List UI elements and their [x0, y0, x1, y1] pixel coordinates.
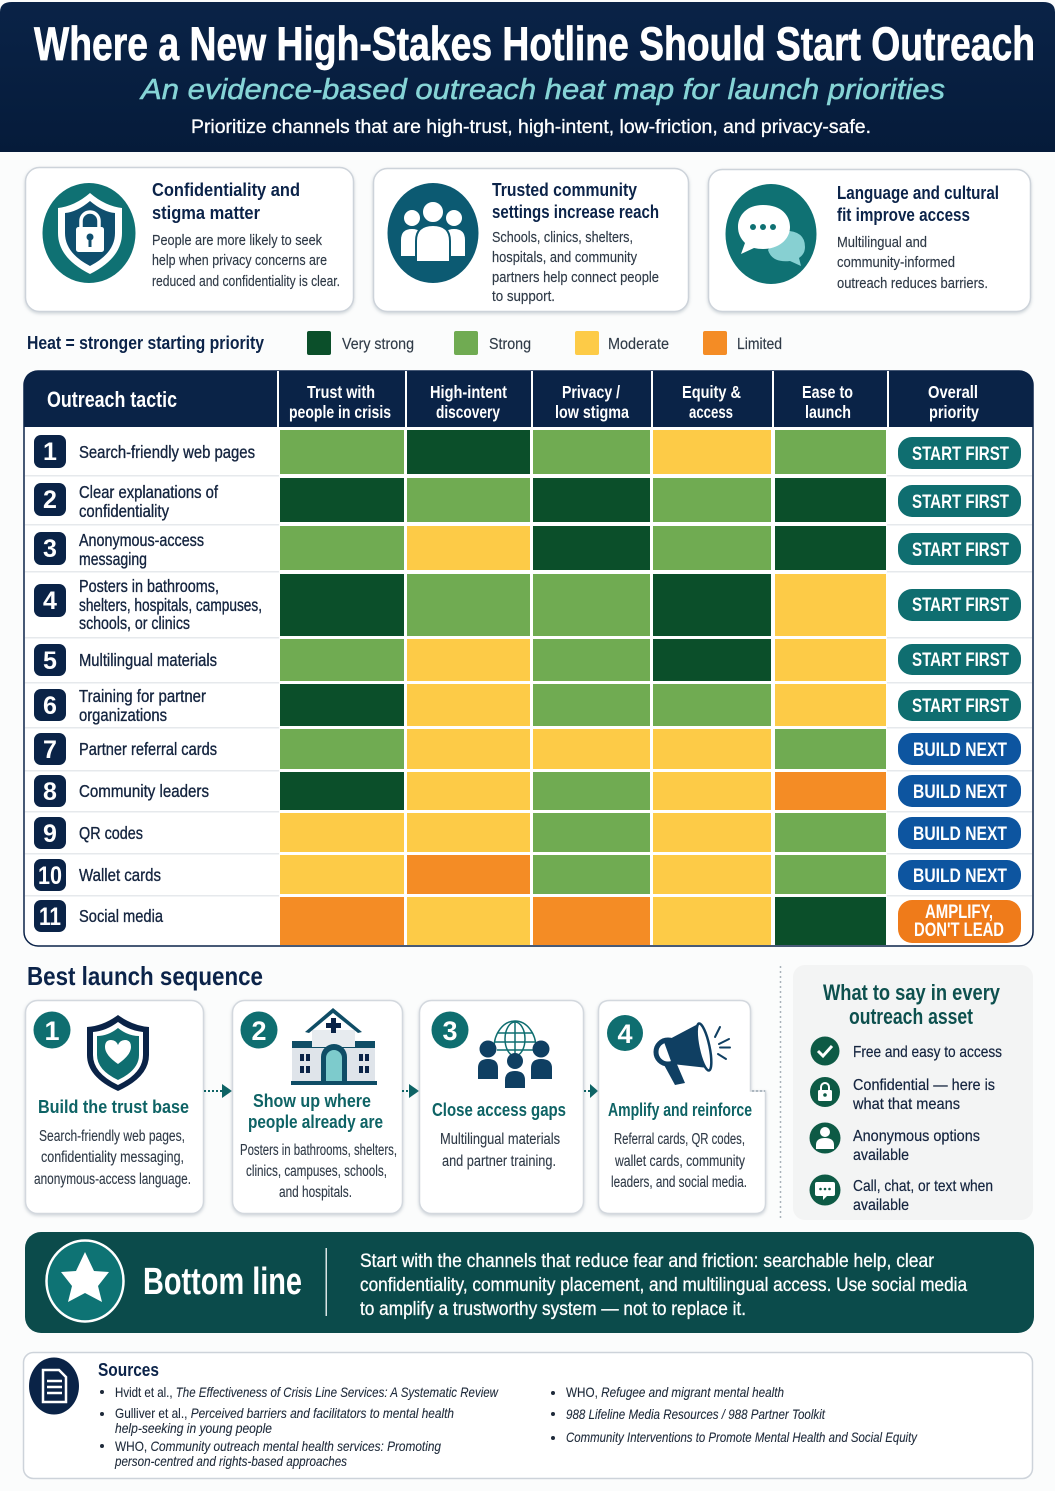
body text: reduced and confidentiality is clear. [152, 273, 340, 290]
row 6: training for partner organizations: 6 [43, 692, 57, 720]
item: free and easy [810, 1036, 1002, 1066]
subtitle: An evidence-based outreach heat map for launch priorities [139, 74, 945, 106]
item: confidential [810, 1077, 995, 1113]
table header: Ease to [802, 382, 853, 402]
step description: and hospitals. [279, 1184, 352, 1201]
item: call chat text [810, 1174, 993, 1214]
step description [34, 1128, 191, 1188]
row 3: anonymous-access messaging: 3 [43, 535, 57, 563]
panel: trusted community settings [374, 168, 688, 312]
panel: confidentiality and stigma [26, 168, 354, 312]
step 4: amplify and reinforce [598, 1000, 766, 1214]
table header: discovery [436, 402, 500, 422]
step description: clinics, campuses, schools, [246, 1163, 387, 1180]
table header: Privacy / [562, 382, 620, 402]
step description [611, 1131, 747, 1191]
row 11: social media [34, 897, 1021, 945]
step heading: Close access gaps [432, 1099, 566, 1120]
sources heading: Sources [98, 1360, 159, 1380]
item: anonymous: available [853, 1147, 909, 1164]
arrow: step 2 to 3 [402, 1084, 419, 1098]
step heading [248, 1090, 383, 1132]
step description: Posters in bathrooms, shelters, [240, 1142, 397, 1159]
table header: High-intent [430, 382, 507, 402]
icon: shield with heart [87, 1015, 149, 1091]
heading [837, 182, 999, 225]
row 4: posters: shelters, hospitals, campuses, [79, 595, 262, 615]
row 9: QR codes: QR codes [79, 823, 143, 843]
step heading: Amplify and reinforce [608, 1099, 752, 1120]
number badge 1 [34, 1012, 70, 1048]
arrow: step 1 to 2 [204, 1084, 232, 1098]
bottom line text: confidentiality, community placement, and multilingual access. Use social media [360, 1275, 967, 1296]
step 2: show up where people already are [232, 1000, 402, 1214]
number badge 3 [432, 1012, 468, 1048]
step heading: Show up where [253, 1090, 371, 1111]
row 6: training for partner organizations [25, 684, 1032, 728]
table header: Equity & [682, 382, 741, 402]
item: confidential: what that means [852, 1096, 960, 1113]
step 1: build the trust base [26, 1000, 204, 1214]
row 3: anonymous-access messaging: messaging [79, 549, 147, 569]
number badge 4 [607, 1015, 643, 1051]
arrow: step 3 to 4 [584, 1084, 598, 1098]
legend item: limited [703, 331, 782, 355]
row 11: social media: DON'T LEAD [914, 919, 1004, 941]
legend title: Heat = stronger starting priority [27, 333, 264, 353]
number badge 1: 1 [44, 1016, 60, 1046]
row 9: QR codes [25, 813, 1032, 854]
step description: Referral cards, QR codes, [614, 1131, 745, 1148]
bottom line text: to amplify a trustworthy system — not to replace it. [360, 1299, 746, 1320]
row 3: anonymous-access messaging [25, 526, 1032, 572]
heading: Language and cultural [837, 182, 999, 203]
step description: and partner training. [442, 1153, 556, 1170]
row 8: community leaders: BUILD NEXT [913, 781, 1007, 803]
body text [152, 232, 340, 290]
source list: left column: person-centred and rights-based approaches [114, 1453, 347, 1469]
body text [492, 229, 659, 305]
row 11: social media: 11 [39, 903, 61, 931]
step description [240, 1142, 397, 1201]
body text: Multilingual and [837, 234, 927, 251]
row 6: training for partner organizations: organizations [79, 705, 167, 725]
row 5: multilingual materials: 5 [43, 647, 57, 675]
row 5: multilingual materials: START FIRST [912, 649, 1009, 671]
item: anonymous: Anonymous options [853, 1128, 980, 1145]
row 5: multilingual materials [25, 639, 1032, 684]
bottom line label: Bottom line [143, 1261, 302, 1303]
row 4: posters: 4 [43, 587, 57, 615]
heading: fit improve access [837, 204, 970, 225]
row 4: posters: START FIRST [912, 594, 1009, 616]
source list: left column: WHO, Community outreach mental health services: Promoting [115, 1438, 441, 1454]
legend item: very strong: Very strong [342, 336, 414, 353]
panel heading [823, 980, 1001, 1029]
legend item: strong: Strong [489, 336, 531, 353]
step heading: Build the trust base [38, 1096, 189, 1117]
body text: Schools, clinics, shelters, [492, 229, 633, 246]
row 4: posters: Posters in bathrooms, [79, 576, 219, 596]
row 10: wallet cards: Wallet cards [79, 865, 161, 885]
row 7: partner referral cards: BUILD NEXT [913, 739, 1007, 761]
row 2: clear explanations of confidentiality: 2 [43, 486, 57, 514]
legend [27, 331, 782, 355]
table header: Overall [928, 382, 978, 402]
row 10: wallet cards: 10 [38, 862, 62, 890]
body text: community-informed [837, 254, 955, 271]
source list: left column: help-seeking in young people [115, 1420, 272, 1436]
tagline: Prioritize channels that are high-trust, high-intent, low-friction, and privacy-safe. [191, 116, 871, 138]
source list: left column: Hvidt et al., The Effectiveness of Crisis Line Services: A Systematic Review [115, 1384, 499, 1400]
row 1: search-friendly web pages: Search-friendly web pages [79, 442, 255, 462]
heading: settings increase reach [492, 201, 659, 222]
row 6: training for partner organizations: START FIRST [912, 695, 1009, 717]
row 7: partner referral cards: Partner referral cards [79, 739, 217, 759]
row 2: clear explanations of confidentiality: confidentiality [79, 501, 169, 521]
row 2: clear explanations of confidentiality: Clear explanations of [79, 482, 218, 502]
bottom line text [360, 1251, 967, 1320]
row 7: partner referral cards [25, 729, 1032, 772]
row 2: clear explanations of confidentiality [25, 478, 1032, 526]
icon: hospital building [291, 1008, 377, 1085]
panel: language and cultural fit [708, 170, 1030, 312]
legend item: moderate: Moderate [608, 336, 669, 353]
source list: right column: WHO, Refugee and migrant mental health [566, 1384, 784, 1400]
heat map table [24, 371, 1033, 946]
heading: Confidentiality and [152, 179, 300, 200]
row 11: social media: Social media [79, 906, 163, 926]
row 4: posters [25, 574, 1032, 638]
source list: right column [551, 1384, 918, 1445]
step description: confidentiality messaging, [41, 1149, 184, 1166]
legend item: limited: Limited [737, 336, 782, 353]
row 5: multilingual materials: Multilingual materials [79, 650, 217, 670]
source list: left column [100, 1384, 499, 1469]
icon: document [29, 1358, 79, 1414]
icon: star [46, 1240, 124, 1322]
table header [24, 371, 1033, 427]
panel heading: outreach asset [849, 1004, 974, 1029]
table header: Trust with [307, 382, 375, 402]
heading [492, 179, 659, 222]
row 4: posters: schools, or clinics [79, 613, 190, 633]
row 8: community leaders: 8 [43, 778, 57, 806]
step heading: people already are [248, 1111, 383, 1132]
row 9: QR codes: BUILD NEXT [913, 823, 1007, 845]
table header: access [689, 402, 733, 422]
panel: what to say in every outreach asset [793, 965, 1033, 1220]
item: call chat text: Call, chat, or text when [853, 1178, 993, 1195]
number badge 3: 3 [442, 1016, 458, 1046]
row 11: social media: AMPLIFY, [925, 901, 993, 923]
step description: leaders, and social media. [611, 1174, 747, 1191]
table header: priority [929, 402, 979, 422]
table header: launch [805, 402, 851, 422]
icon: shield with lock [42, 183, 136, 283]
source list: right column: 988 Lifeline Media Resources / 988 Partner Toolkit [566, 1406, 826, 1422]
row 1: search-friendly web pages [25, 430, 1032, 476]
step description: Search-friendly web pages, [39, 1128, 185, 1145]
source list: left column: Gulliver et al., Perceived barriers and facilitators to mental health [115, 1405, 454, 1421]
step description: wallet cards, community [614, 1153, 745, 1170]
body text: to support. [492, 288, 555, 305]
icon: speech bubbles [726, 184, 816, 284]
step description: Multilingual materials [440, 1131, 560, 1148]
item: free and easy: Free and easy to access [853, 1044, 1002, 1061]
number badge 2 [240, 1012, 278, 1048]
row 2: clear explanations of confidentiality: START FIRST [912, 491, 1009, 513]
item: call chat text: available [853, 1197, 909, 1214]
panel: sources [24, 1352, 1032, 1478]
body text: People are more likely to seek [152, 232, 322, 249]
row 1: search-friendly web pages: 1 [43, 438, 57, 466]
row 6: training for partner organizations: Training for partner [79, 686, 206, 706]
body text: outreach reduces barriers. [837, 275, 988, 292]
number badge 4: 4 [617, 1019, 633, 1049]
row 1: search-friendly web pages: START FIRST [912, 443, 1009, 465]
row 9: QR codes: 9 [43, 820, 57, 848]
item: confidential: Confidential — here is [853, 1077, 995, 1094]
table header: low stigma [555, 402, 629, 422]
panel heading: What to say in every [823, 980, 1001, 1005]
row 10: wallet cards: BUILD NEXT [913, 865, 1007, 887]
heading: best launch sequence: Best launch sequence [27, 961, 263, 991]
step description: anonymous-access language. [34, 1171, 191, 1188]
row 10: wallet cards [25, 855, 1032, 896]
heading: stigma matter [152, 202, 260, 223]
heading [152, 179, 300, 223]
number badge 2: 2 [251, 1016, 267, 1046]
legend item: strong [454, 331, 531, 355]
icon: people around globe [478, 1021, 552, 1088]
body text: help when privacy concerns are [152, 252, 327, 269]
icon: people group [388, 183, 478, 283]
body text: partners help connect people [492, 269, 659, 286]
icon: megaphone [656, 1022, 730, 1085]
body text: hospitals, and community [492, 249, 637, 266]
row 3: anonymous-access messaging: Anonymous-access [79, 530, 204, 550]
callout: bottom line [25, 1232, 1034, 1333]
legend item: very strong [307, 331, 414, 355]
body text [837, 234, 988, 292]
row 8: community leaders: Community leaders [79, 781, 209, 801]
legend item: moderate [575, 331, 669, 355]
row 7: partner referral cards: 7 [43, 736, 57, 764]
source list: right column: Community Interventions to Promote Mental Health and Social Equity [566, 1429, 918, 1445]
row 8: community leaders [25, 772, 1032, 812]
row 3: anonymous-access messaging: START FIRST [912, 539, 1009, 561]
table header: people in crisis [289, 402, 391, 422]
bottom line text: Start with the channels that reduce fear and friction: searchable help, clear [360, 1251, 935, 1272]
step description [440, 1131, 560, 1170]
step 3: close access gaps [420, 1000, 584, 1214]
heading: Trusted community [492, 179, 638, 200]
item: anonymous [810, 1122, 980, 1164]
header banner [0, 2, 1055, 152]
table header: Outreach tactic [47, 387, 177, 412]
